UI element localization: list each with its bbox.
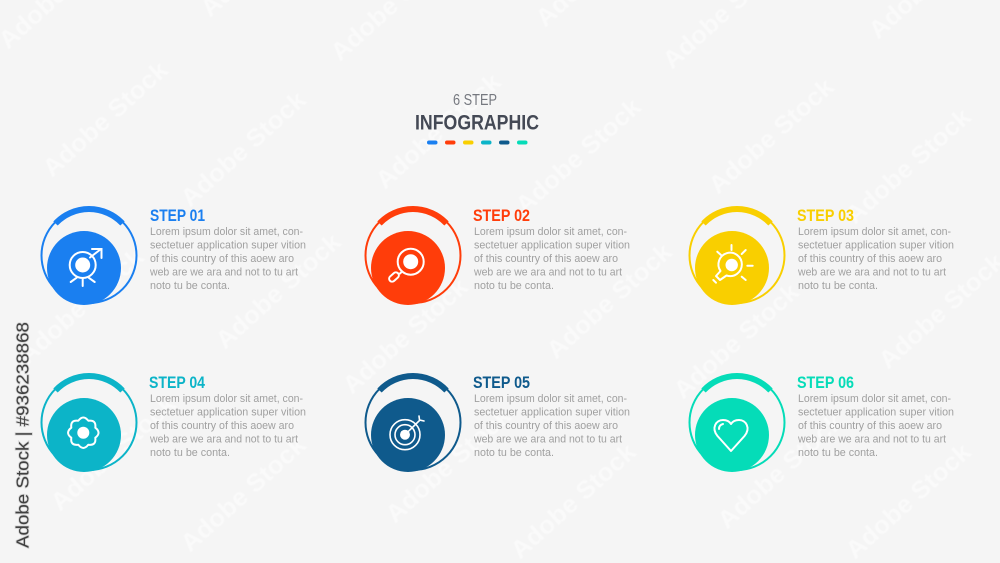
icon: light bulb: [713, 245, 753, 283]
text block: step 02: Lorem ipsum dolor sit amet, con-: [474, 226, 627, 238]
heading: step 05: STEP 05: [473, 374, 530, 392]
text block: step 03: noto tu be conta.: [798, 280, 878, 292]
watermark pattern: Adobe Stock: [505, 438, 642, 563]
text block: step 01: Lorem ipsum dolor sit amet, con-: [150, 226, 303, 238]
text block: step 04: [149, 393, 306, 459]
heading: step 02: STEP 02: [473, 207, 530, 225]
text block: step 05: sectetuer application super vition: [474, 406, 630, 418]
text block: step 03: Lorem ipsum dolor sit amet, con-: [798, 226, 951, 238]
heading: step 03: STEP 03: [797, 207, 854, 225]
watermark pattern: Adobe Stock: [541, 238, 678, 364]
text block: step 03: sectetuer application super vition: [798, 240, 954, 252]
watermark pattern: Adobe Stock: [380, 402, 517, 528]
text block: step 05: Lorem ipsum dolor sit amet, con-: [474, 393, 627, 405]
text block: step 05: noto tu be conta.: [474, 447, 554, 459]
watermark pattern: Adobe Stock: [668, 278, 805, 404]
panel: step 05: [366, 374, 630, 472]
panel: step 03: [690, 207, 954, 305]
title: [415, 92, 539, 134]
watermark pattern: Adobe Stock: [510, 93, 647, 219]
text block: step 02: of this country of this aoew aro: [474, 253, 618, 265]
panel: step 04: [42, 374, 306, 472]
heading: step 01: STEP 01: [150, 207, 205, 225]
icon: male symbol target: [70, 249, 102, 286]
text block: step 05: of this country of this aoew aro: [474, 420, 618, 432]
text block: step 04: Lorem ipsum dolor sit amet, con-: [150, 393, 303, 405]
text block: step 03: [797, 226, 954, 292]
text block: step 01: of this country of this aoew aro: [150, 253, 294, 265]
text block: step 05: [473, 393, 630, 459]
badge: step 02 circle: [366, 208, 460, 305]
icon: heart: [714, 420, 748, 451]
heading: step 04: STEP 04: [149, 374, 206, 392]
text block: step 01: web are we ara and not to tu art: [149, 266, 298, 278]
text block: step 05: web are we ara and not to tu art: [473, 434, 622, 446]
text block: step 04: sectetuer application super vition: [150, 406, 306, 418]
badge: step 04 circle: [42, 375, 136, 472]
text block: step 04: web are we ara and not to tu art: [149, 434, 298, 446]
heading: step 06: STEP 06: [797, 374, 854, 392]
watermark pattern: Adobe Stock: [175, 86, 312, 212]
text block: step 04: of this country of this aoew aro: [150, 420, 294, 432]
text block: step 02: web are we ara and not to tu art: [473, 266, 622, 278]
badge: step 05 circle: [366, 375, 460, 472]
text block: step 06: sectetuer application super vition: [798, 406, 954, 418]
text block: step 02: sectetuer application super vition: [474, 240, 630, 252]
watermark pattern: Adobe Stock: [175, 431, 312, 557]
text block: step 06: of this country of this aoew aro: [798, 420, 942, 432]
watermark pattern: Adobe Stock: [337, 273, 474, 399]
panel: step 02: [366, 207, 630, 305]
watermark pattern: Adobe Stock: [370, 68, 507, 194]
icon: target with arrow: [390, 416, 424, 450]
watermark pattern: Adobe Stock: [45, 390, 182, 516]
text block: step 01: noto tu be conta.: [150, 280, 230, 292]
text block: step 03: web are we ara and not to tu art: [797, 266, 946, 278]
text block: step 06: noto tu be conta.: [798, 447, 878, 459]
text block: step 03: of this country of this aoew aro: [798, 253, 942, 265]
watermark pattern: Adobe Stock: [13, 243, 150, 369]
text block: step 04: noto tu be conta.: [150, 447, 230, 459]
text block: step 06: Lorem ipsum dolor sit amet, con-: [798, 393, 951, 405]
badge: step 01 circle: [42, 208, 136, 305]
watermark pattern: Adobe Stock: [840, 103, 977, 229]
watermark pattern: Adobe Stock: [703, 73, 840, 199]
icon: gear flower: [68, 417, 99, 448]
colour dashes: [427, 140, 528, 144]
watermark pattern: Adobe Stock: [210, 228, 347, 354]
stock id side text: Adobe Stock | #936238868: [12, 322, 32, 548]
text block: step 06: [797, 393, 954, 459]
watermark pattern: Adobe Stock: [712, 408, 849, 534]
badge: step 03 circle: [690, 208, 784, 305]
text block: step 01: [149, 226, 306, 292]
text block: step 02: noto tu be conta.: [474, 280, 554, 292]
icon: magnifying glass: [388, 249, 424, 283]
watermark pattern: Adobe Stock: [37, 56, 174, 182]
panel: step 01: [42, 207, 306, 305]
text block: step 06: web are we ara and not to tu art: [797, 434, 946, 446]
badge: step 06 circle: [690, 375, 784, 472]
panel: step 06: [690, 374, 954, 472]
subtitle: 6 STEP: 6 STEP: [453, 92, 497, 109]
text block: step 02: [473, 226, 630, 292]
watermark pattern: Adobe Stock: [840, 438, 977, 563]
text block: step 01: sectetuer application super vition: [150, 240, 306, 252]
heading: INFOGRAPHIC: INFOGRAPHIC: [415, 110, 539, 134]
